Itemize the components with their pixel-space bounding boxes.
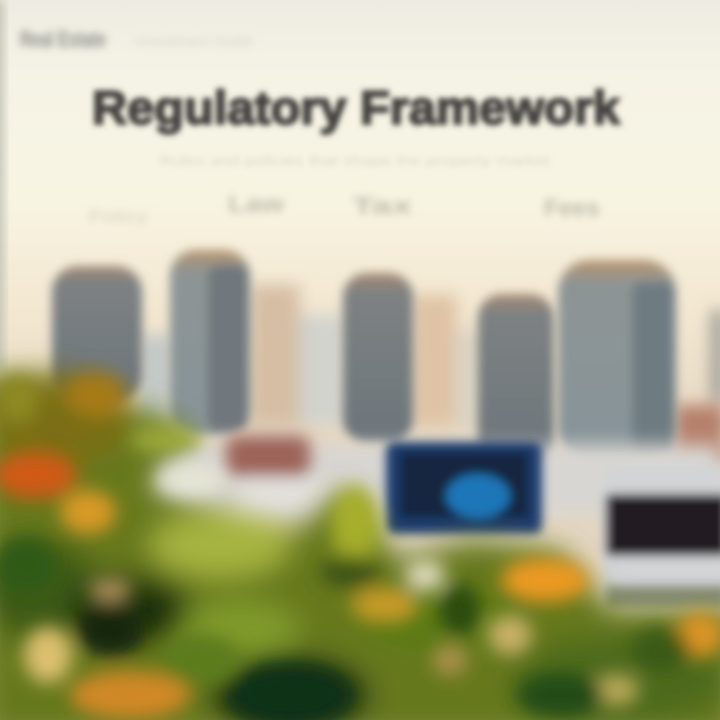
low haze buildings [140, 285, 720, 465]
left edge shade [0, 0, 4, 370]
labels above towers: Fees [544, 195, 600, 222]
blue screen [386, 442, 542, 534]
labels above towers: Law [228, 191, 284, 218]
labels above towers [88, 191, 600, 226]
small header text: Investment Guide [135, 33, 253, 49]
small header text [20, 26, 253, 52]
tower 5 [558, 260, 676, 460]
bus [602, 466, 720, 607]
foliage [0, 372, 720, 720]
labels above towers: Tax [352, 193, 413, 220]
tower 1 [52, 266, 142, 401]
skyline [52, 250, 720, 465]
tower 2 [170, 250, 250, 435]
subtitle line: Rules and policies that shape the property market [160, 153, 551, 168]
labels above towers: Policy [88, 207, 149, 226]
red car [226, 436, 330, 516]
tower 4 [478, 294, 554, 464]
foliage base [0, 372, 720, 720]
leaves and blossoms [0, 373, 720, 720]
title: Regulatory Framework [92, 81, 621, 134]
street haze [150, 445, 720, 515]
small header text: Real Estate [20, 26, 106, 52]
tower 3 [343, 273, 413, 443]
